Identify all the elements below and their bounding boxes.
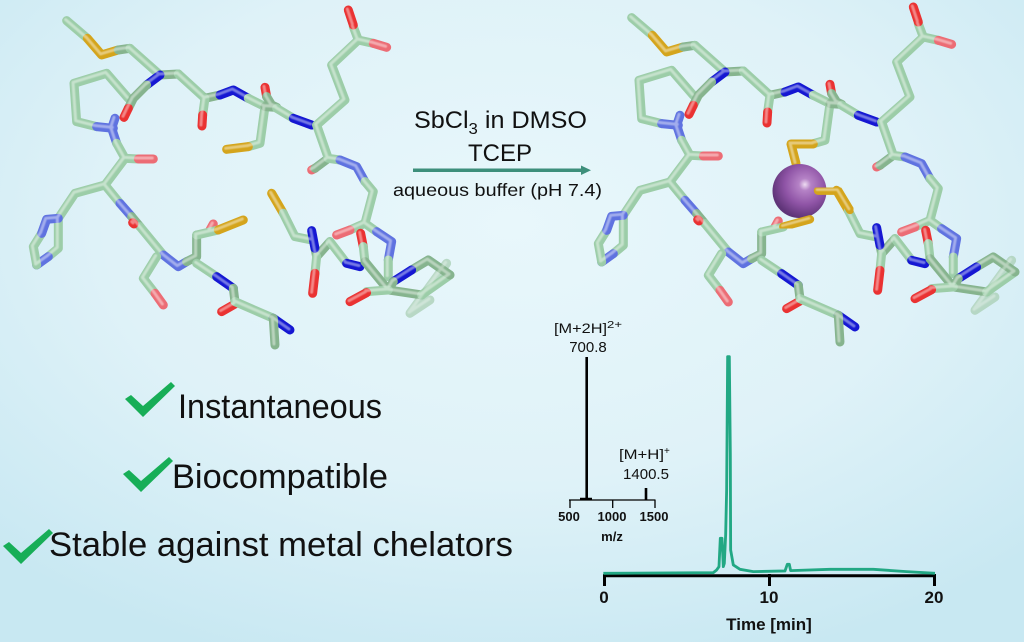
peak labels: 1400.5 <box>623 466 669 483</box>
time tick labels: 0 <box>599 588 609 607</box>
additive label: TCEP <box>468 140 532 167</box>
antimony-sulfur bonds <box>782 190 850 227</box>
mass spectrum chart <box>554 320 670 544</box>
time tick labels: 10 <box>760 588 778 607</box>
axis tick labels: m/z <box>601 529 623 544</box>
icon: check <box>123 457 173 492</box>
peak labels: 2+ <box>607 320 622 331</box>
axis tick labels: 1000 <box>598 509 626 524</box>
feature list with check marks <box>3 382 513 564</box>
reagent label: 3 <box>469 121 478 138</box>
peak labels: 700.8 <box>569 339 607 356</box>
feature text: Biocompatible <box>172 458 388 496</box>
axis tick labels: 1500 <box>640 509 668 524</box>
reagent label: in DMSO <box>478 107 587 134</box>
feature text: Instantaneous <box>178 388 382 426</box>
axis tick labels: 500 <box>558 509 580 524</box>
green trace <box>603 357 935 573</box>
peak labels: [M+2H] <box>554 320 607 336</box>
molecule: antimony-bound peptide <box>597 6 1015 342</box>
icon: check <box>125 382 175 417</box>
icon: antimony sphere <box>772 164 826 218</box>
reaction arrow with conditions <box>393 107 602 200</box>
axis tick labels <box>558 509 668 544</box>
feature text: Stable against metal chelators <box>49 526 513 564</box>
reagent label: SbCl <box>414 107 466 134</box>
HPLC chromatogram <box>599 357 943 634</box>
time tick labels: 20 <box>925 588 943 607</box>
buffer label: aqueous buffer (pH 7.4) <box>393 180 602 200</box>
molecule: free peptide with separate cysteine thiols <box>32 9 450 345</box>
peak labels: + <box>664 446 670 457</box>
peak labels <box>554 320 670 483</box>
arrow <box>413 166 591 175</box>
time tick labels <box>599 588 943 607</box>
peak labels: [M+H] <box>619 446 664 462</box>
icon: check <box>3 529 53 564</box>
spectrum sticks and axis <box>569 357 656 508</box>
time axis <box>604 574 935 586</box>
time axis title: Time [min] <box>726 615 812 634</box>
